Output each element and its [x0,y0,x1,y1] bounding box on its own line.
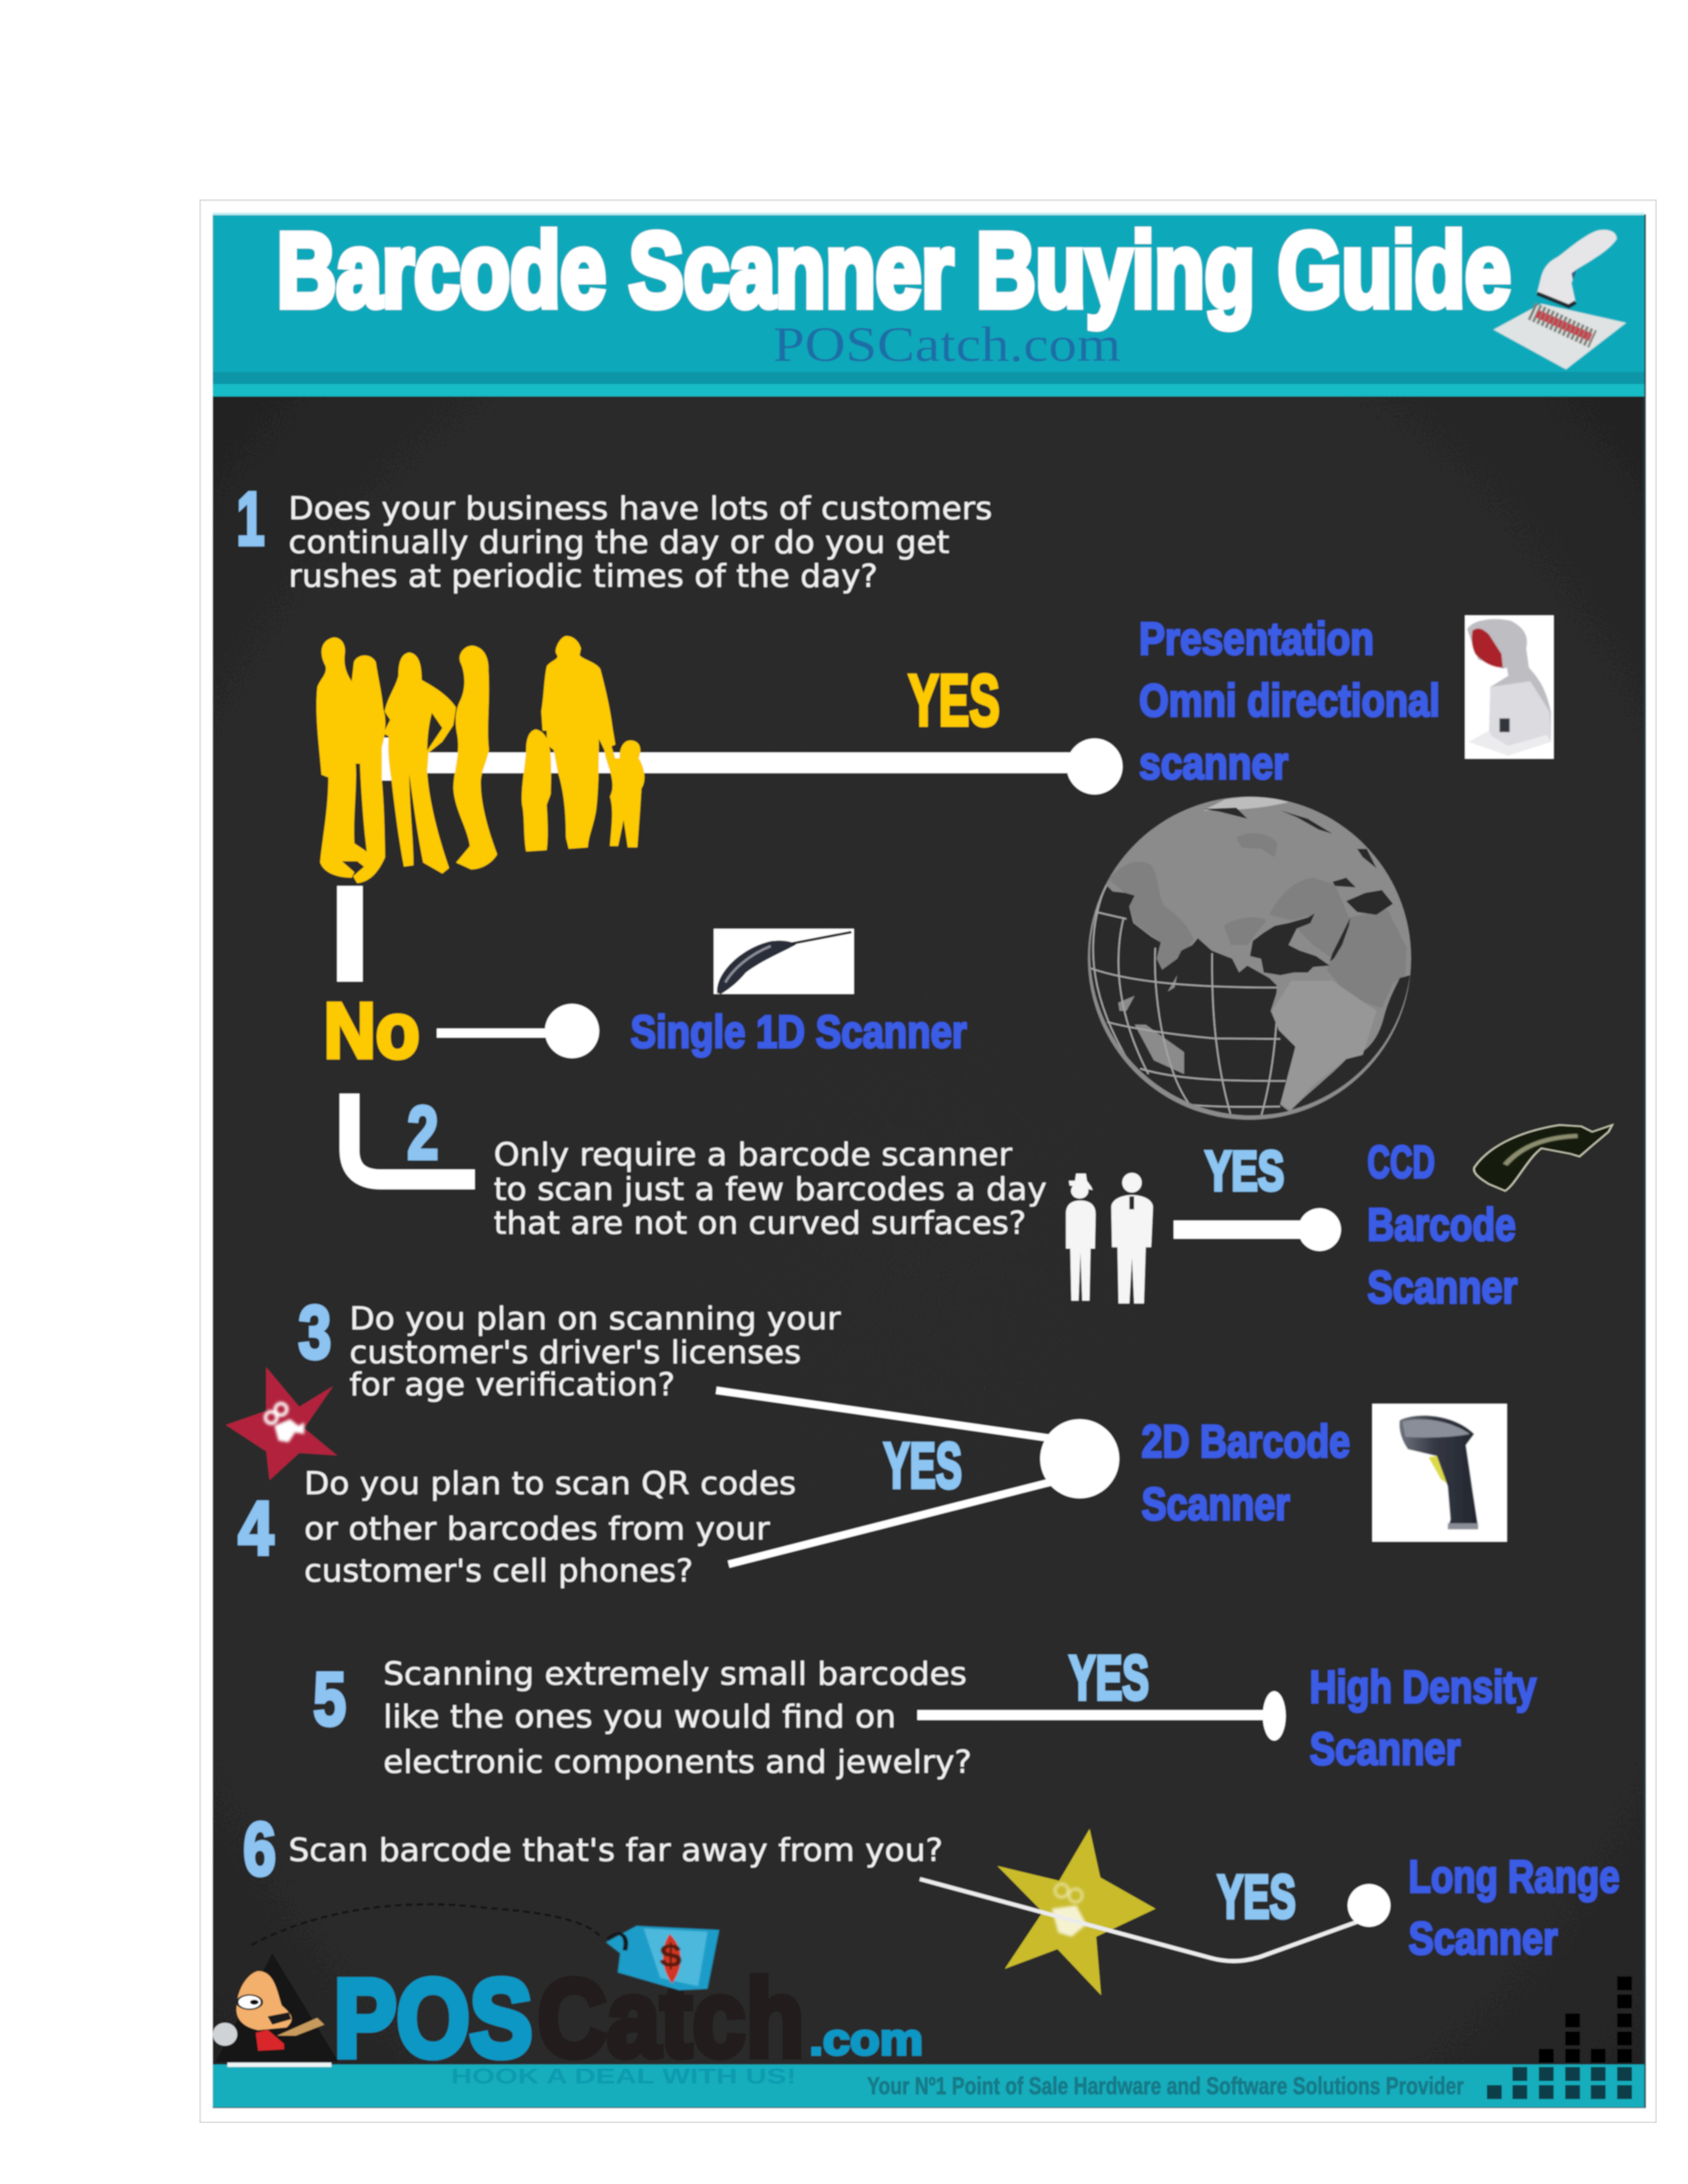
label: 2D barcode scanner: Scanner [1142,1478,1290,1530]
question 1 text: rushes at periodic times of the day? [288,558,878,594]
question 5 [313,1656,972,1780]
question 1 text [288,490,992,594]
label: 2D barcode scanner [1142,1415,1350,1530]
label: CCD barcode scanner: Barcode [1367,1198,1516,1250]
question 2 text: to scan just a few barcodes a day [494,1171,1047,1207]
arrow: questions 3 and 4 merge into 2D scanner [716,1390,1119,1564]
label: high density scanner: High Density [1310,1661,1536,1713]
question 2 text: Only require a barcode scanner [494,1137,1012,1173]
globe grid [1090,884,1287,1116]
question 5 text: Scanning extremely small barcodes [383,1656,967,1692]
logo hook with dollar flag [606,1926,720,1990]
icon: header scanner on barcode card [1493,230,1626,369]
label: long range scanner: Long Range [1409,1850,1620,1902]
oceans [1090,808,1410,1115]
question 3 text: Do you plan on scanning your [349,1301,841,1337]
question 1 [237,477,992,594]
question 2 text: that are not on curved surfaces? [494,1205,1026,1241]
label: long range scanner: Scanner [1409,1912,1558,1964]
label: presentation omni directional scanner: Presentation [1139,612,1374,664]
arrow: bent connector to question 2 [349,1094,475,1179]
question 6 [243,1807,943,1891]
outer frame [199,199,1657,2123]
label: single 1D scanner: Single 1D Scanner [631,1005,967,1057]
question 2 [407,1091,1047,1241]
logo text: POS [334,1957,532,2080]
logo text: .com [809,2015,923,2064]
label: presentation omni directional scanner: Omni directional [1139,674,1440,726]
logo text: Catch [537,1957,804,2080]
arrow: yes connector to CCD scanner [1174,1208,1341,1251]
question 4 text [304,1465,796,1589]
number 3: 3 [298,1291,331,1375]
label: high density scanner: Scanner [1310,1722,1461,1774]
number 2: 2 [407,1091,438,1175]
logo fisherman mascot [213,1953,339,2067]
logo: POSCatch.com [213,1905,923,2080]
darker land regions [1109,833,1407,1008]
label: yes 3: YES [884,1429,962,1502]
question 5 text [383,1656,972,1780]
question 3 [298,1291,841,1403]
icon: CCD scanner [1474,1125,1612,1191]
logo hook with dollar flag: $ [659,1937,682,1974]
label: yes 2: YES [1205,1140,1284,1202]
label: presentation omni directional scanner [1139,612,1440,789]
arrow: no connector to single 1D scanner [437,1004,599,1058]
logo fishing line [251,1905,602,1945]
question 3 text [349,1301,841,1403]
label: no: No [324,987,420,1075]
label: high density scanner [1310,1661,1536,1774]
logo text [334,1957,923,2080]
arrow: connector to high density scanner [917,1691,1286,1741]
icon: yellow family silhouettes [316,636,645,883]
arrow: curved connector to long range scanner [920,1879,1390,1961]
question 1 text: continually during the day or do you get [288,524,950,560]
arrow: yes connector to presentation scanner [382,738,1123,794]
number 1: 1 [237,477,265,561]
question 5 text: like the ones you would find on [383,1699,896,1735]
question 4 [238,1465,796,1589]
icon: single 1D scanner photo [714,929,854,994]
label: 2D barcode scanner: 2D Barcode [1142,1415,1350,1467]
chalkboard panel [213,214,1646,2108]
islands and southern land [1118,975,1184,1074]
label: CCD barcode scanner: Scanner [1367,1261,1517,1313]
question 4 text: Do you plan to scan QR codes [304,1465,796,1502]
label: long range scanner [1409,1850,1620,1964]
question 3 text: for age verification? [349,1366,675,1403]
icon: 2D scanner photo [1372,1404,1507,1542]
label: yes 1: YES [908,659,1000,741]
question 5 text: electronic components and jewelry? [383,1744,972,1780]
question 2 text [494,1137,1047,1241]
icon: globe [1088,797,1411,1120]
equalizer dark cells [1539,1976,1632,2063]
question 6 text: Scan barcode that's far away from you? [288,1832,943,1868]
label: CCD barcode scanner: CCD [1367,1136,1435,1188]
question 4 text: customer's cell phones? [304,1553,693,1589]
question 3 text: customer's driver's licenses [349,1334,801,1371]
icon: presentation scanner photo [1465,616,1554,759]
label: CCD barcode scanner [1367,1136,1517,1313]
footer slogan: HOOK A DEAL WITH US! [451,2064,796,2088]
number 4: 4 [238,1487,274,1571]
footer tagline: Your Nº1 Point of Sale Hardware and Software Solutions Provider [867,2073,1464,2100]
icon: red star with camera [226,1367,337,1480]
label: presentation omni directional scanner: scanner [1139,737,1288,789]
equalizer teal cells [1487,2067,1632,2099]
label: yes 5: YES [1217,1863,1296,1931]
header band [213,212,1644,396]
icon: two white men [1066,1173,1153,1304]
number 6: 6 [243,1807,276,1891]
label: yes 4: YES [1069,1643,1149,1713]
question 1 text: Does your business have lots of customers [288,490,992,527]
question 4 text: or other barcodes from your [304,1511,770,1547]
footer band [213,2064,1644,2107]
icon: yellow star with camera [997,1829,1156,1995]
infographic canvas [199,199,1657,2123]
arrow: no vertical connector [337,886,363,982]
subtitle: POSCatch.com [773,317,1121,372]
number 5: 5 [313,1657,346,1741]
icon: equalizer bars [1487,1976,1632,2099]
